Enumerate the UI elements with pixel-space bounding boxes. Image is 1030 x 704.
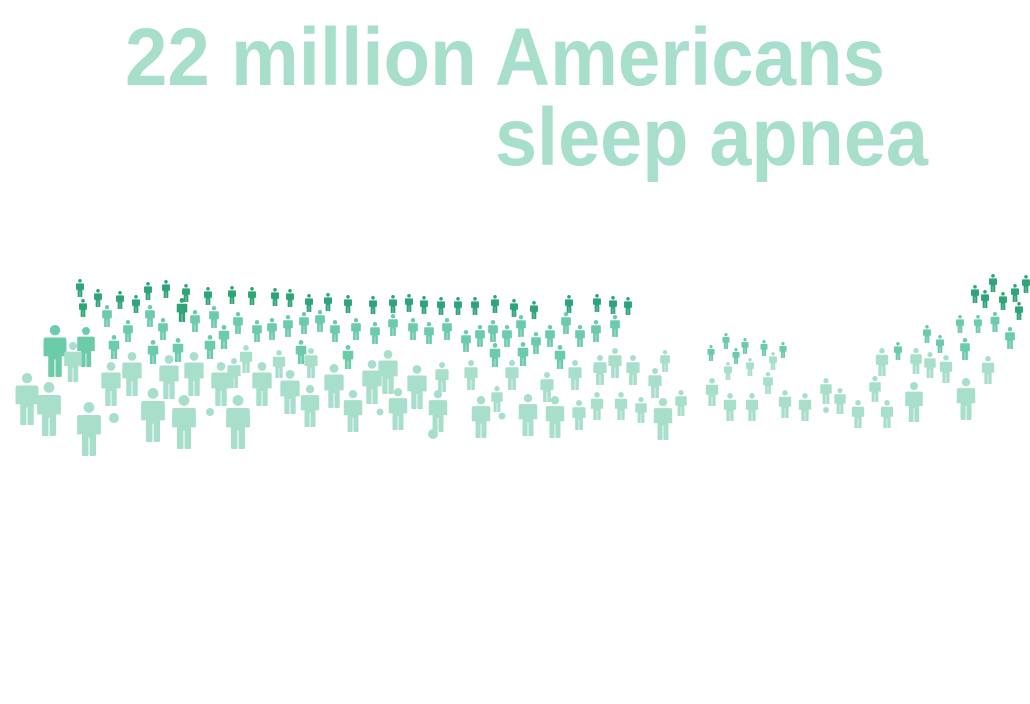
crowd of people bbox=[16, 274, 1030, 456]
title: 22 million Americans bbox=[125, 12, 885, 103]
title bbox=[125, 12, 929, 183]
title: sleep apnea bbox=[495, 92, 929, 183]
